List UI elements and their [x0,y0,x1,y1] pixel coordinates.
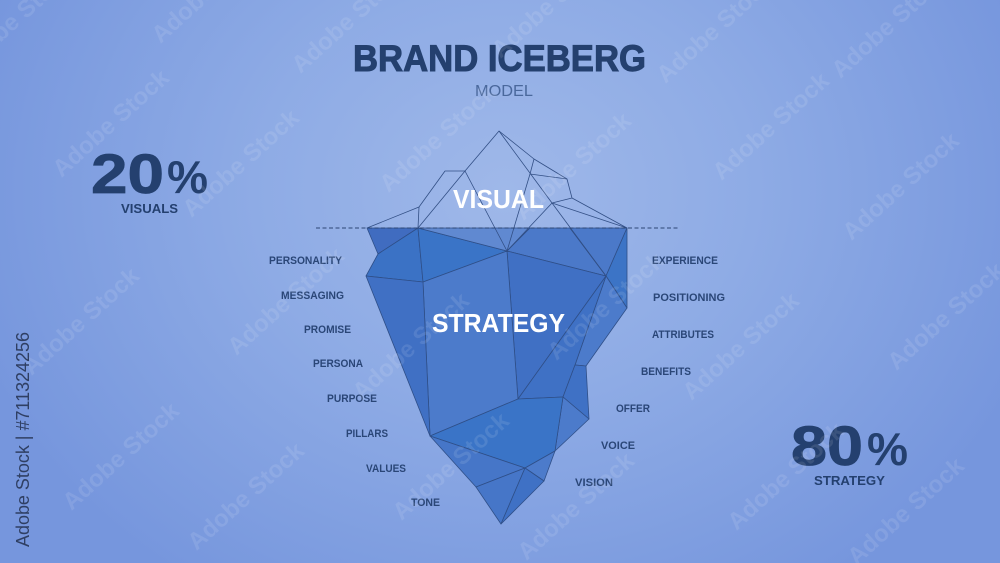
left labels: PILLARS [346,428,388,440]
watermarks: Adobe Stock [837,127,965,246]
watermarks: Adobe Stock [512,447,640,563]
stat: 20% visuals: % [167,151,208,203]
stat: 80% strategy: STRATEGY [814,473,885,488]
watermarks: Adobe Stock [387,407,515,526]
stat: 80% strategy: 80 [791,414,863,477]
left labels: PURPOSE [327,393,377,405]
right labels: VISION [575,477,613,489]
watermarks: Adobe Stock [542,247,670,366]
stat: 20% visuals: VISUALS [121,201,178,216]
right labels: OFFER [616,403,650,415]
title: BRAND ICEBERG [353,38,646,79]
watermarks: Adobe Stock [722,417,850,536]
stat: 80% strategy: % [867,423,908,475]
left labels: PERSONA [313,358,363,370]
watermarks: Adobe Stock [677,287,805,406]
watermarks: Adobe Stock [57,397,185,516]
label: visual: VISUAL [453,184,544,214]
left labels: PERSONALITY [269,255,343,267]
watermarks: Adobe Stock [177,104,305,223]
subtitle: MODEL [475,83,533,100]
watermarks: Adobe Stock [222,242,350,361]
stock id: Adobe Stock | #711324256 [13,332,33,547]
stat: 20% visuals [91,142,208,216]
watermarks: Adobe Stock [707,67,835,186]
label: strategy: STRATEGY [432,308,565,338]
right labels: EXPERIENCE [652,255,718,267]
left labels [269,255,440,509]
watermarks: Adobe Stock [47,64,175,183]
left labels: PROMISE [304,324,351,336]
right labels: POSITIONING [653,292,725,304]
right labels: BENEFITS [641,366,691,378]
left labels: VALUES [366,463,406,475]
watermarks: Adobe Stock [182,437,310,556]
left labels: MESSAGING [281,290,344,302]
right labels [575,255,725,489]
iceberg [366,131,627,524]
waterline [316,227,680,229]
above-water outline [367,131,627,276]
right labels: VOICE [601,440,635,452]
watermarks: Adobe Stock [509,107,637,226]
stat: 80% strategy [791,414,908,488]
stat: 20% visuals: 20 [91,142,164,205]
underwater facets [366,228,627,524]
watermarks: Adobe Stock [374,79,502,198]
watermarks: Adobe Stock [347,287,475,406]
watermarks: Adobe Stock [17,262,145,381]
right labels: ATTRIBUTES [652,329,714,341]
left labels: TONE [411,497,440,509]
